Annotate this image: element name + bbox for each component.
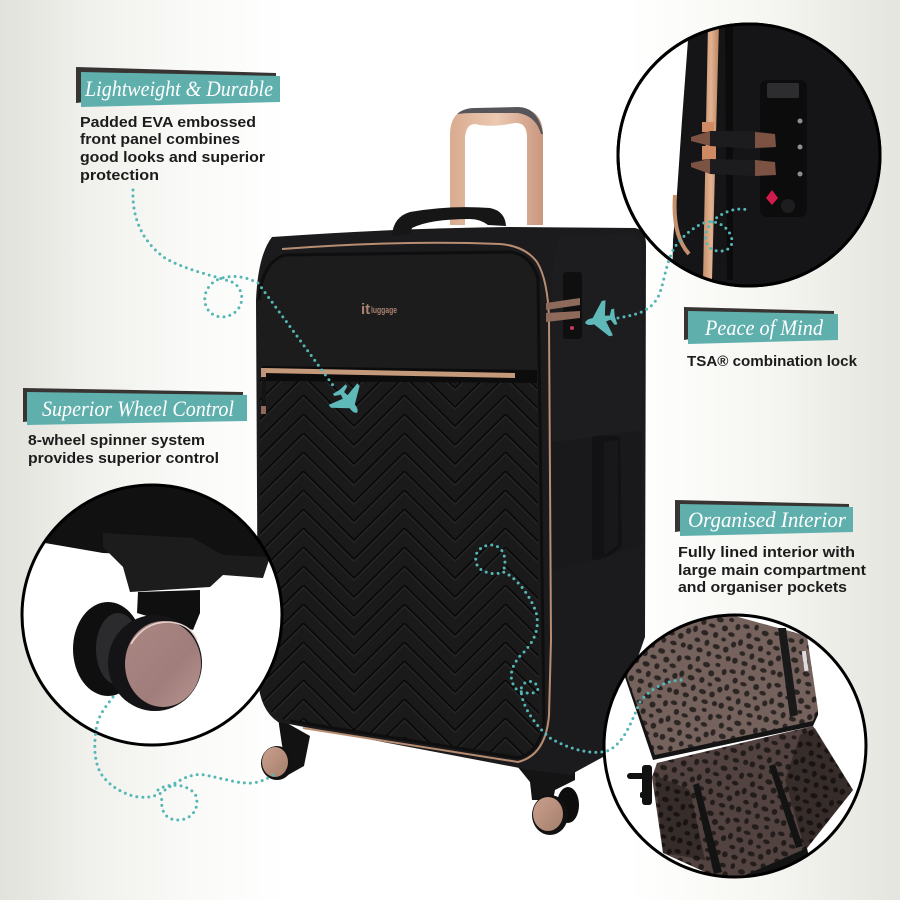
description xyxy=(678,544,866,596)
heading banner: Organised Interior xyxy=(688,507,846,532)
suitcase body xyxy=(256,227,646,775)
dotted path: lightweight xyxy=(133,190,335,388)
rear wheel xyxy=(73,602,136,696)
callout: wheels xyxy=(23,388,247,467)
interior straps xyxy=(693,764,803,874)
heading banner xyxy=(684,307,838,344)
heading banner xyxy=(675,500,853,536)
top handle xyxy=(392,207,506,236)
description: and organiser pockets xyxy=(678,579,847,596)
description: Padded EVA embossed xyxy=(80,114,256,131)
description: TSA® combination lock xyxy=(687,353,858,370)
callout: interior xyxy=(675,500,866,596)
dotted path: interior xyxy=(476,545,683,752)
pocket zip xyxy=(261,366,537,414)
rose gold trim xyxy=(282,243,551,762)
logo: it xyxy=(361,301,370,318)
description: front panel combines xyxy=(80,131,240,148)
lid organiser strap xyxy=(778,628,798,717)
panel: interior detail circle xyxy=(604,610,866,885)
icon: plane on side xyxy=(581,299,619,341)
caster bracket xyxy=(103,533,270,592)
side lock xyxy=(546,272,582,339)
heading banner: Peace of Mind xyxy=(704,315,824,340)
luggage base xyxy=(46,486,267,557)
side panel xyxy=(552,233,643,772)
icon: plane on pocket xyxy=(325,378,371,424)
combination lock xyxy=(760,80,807,217)
heading banner: Superior Wheel Control xyxy=(42,396,234,421)
logo: luggage xyxy=(371,305,397,316)
logo xyxy=(361,301,397,318)
description xyxy=(80,114,265,184)
suitcase base leopard lining xyxy=(652,726,853,882)
mini wheels xyxy=(627,765,652,805)
left rear wheel xyxy=(261,718,310,780)
telescopic handle xyxy=(450,107,543,225)
description: Fully lined interior with xyxy=(678,544,855,561)
description: protection xyxy=(80,167,159,184)
description xyxy=(28,432,219,467)
right front wheel xyxy=(517,766,579,835)
description: provides superior control xyxy=(28,450,219,467)
front upper panel xyxy=(258,252,535,372)
heading banner: Lightweight & Durable xyxy=(84,76,273,101)
heading banner xyxy=(76,67,280,107)
panel: wheel detail circle xyxy=(20,480,290,745)
panel: lock detail circle xyxy=(618,20,885,295)
suitcase side close-up xyxy=(672,20,885,295)
dotted path: peace of mind xyxy=(618,209,747,318)
interior shadow xyxy=(655,728,853,860)
dotted path: wheels xyxy=(95,697,273,820)
description: 8-wheel spinner system xyxy=(28,432,205,449)
description: large main compartment xyxy=(678,562,866,579)
quilted chevron panel xyxy=(260,378,539,756)
front wheel xyxy=(108,615,202,711)
description: good looks and superior xyxy=(80,149,265,166)
wheel cap xyxy=(125,621,201,707)
TSA mark xyxy=(766,190,778,205)
callout: lightweight xyxy=(76,67,280,184)
callout: peace of mind xyxy=(684,307,858,370)
suitcase xyxy=(250,107,646,835)
heading banner xyxy=(23,388,247,425)
zipper xyxy=(703,24,719,280)
front panel seam xyxy=(259,252,544,758)
zipper pulls xyxy=(691,122,776,176)
suitcase lid leopard lining xyxy=(625,610,818,757)
